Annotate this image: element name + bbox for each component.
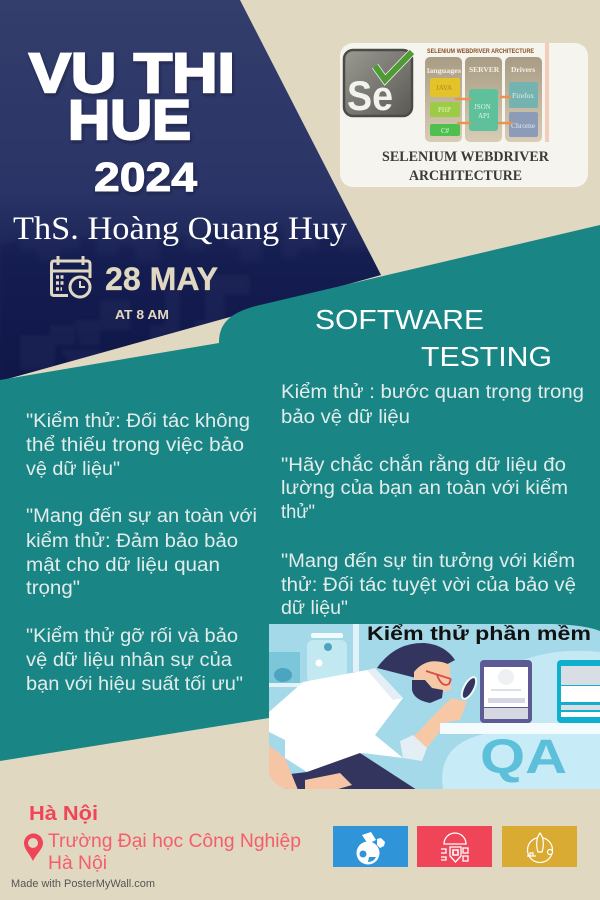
text block: left quotes: "Mang đến sự an toàn với xyxy=(26,505,257,527)
diagram column: server xyxy=(465,57,502,142)
arrows between diagram columns xyxy=(455,97,513,123)
text block: left quotes: thể thiếu trong việc bảo xyxy=(26,434,244,456)
diagram column: server: JSON xyxy=(474,103,491,111)
diagram column: languages: languages xyxy=(427,66,461,75)
location heading: Hà Nội xyxy=(29,803,98,825)
title: VU THI HUE: VU THI xyxy=(29,41,235,104)
text block: left quotes: kiểm thử: Đảm bảo bảo xyxy=(26,530,238,552)
year: 2024 xyxy=(94,154,197,200)
icon: Selenium logo: Se xyxy=(347,72,393,119)
heading: software testing xyxy=(315,304,552,372)
date: 28 MAY xyxy=(105,261,218,297)
phone mockup xyxy=(480,660,532,723)
diagram caption xyxy=(382,149,550,184)
title: VU THI HUE: HUE xyxy=(68,88,191,151)
text block: left quotes xyxy=(26,410,257,695)
figure: Selenium WebDriver architecture xyxy=(340,43,588,187)
icon: Selenium logo xyxy=(344,50,412,119)
text block: right quotes xyxy=(281,381,584,619)
text block: left quotes: "Kiểm thử gỡ rối và bảo xyxy=(26,625,238,647)
diagram caption: SELENIUM WEBDRIVER xyxy=(382,149,550,165)
text block: left quotes: trọng" xyxy=(26,577,80,599)
diagram column: server: SERVER xyxy=(469,65,500,74)
QA letters: QA xyxy=(480,731,567,784)
text block: right quotes: Kiểm thử : bước quan trọng trong xyxy=(281,381,584,403)
heading: software testing: TESTING xyxy=(421,341,552,372)
illustration: QA tester with magnifying glass xyxy=(269,624,600,790)
text block: left quotes: mật cho dữ liệu quan xyxy=(26,554,220,576)
diagram column: server: API xyxy=(478,112,490,120)
icon tile: rocket growth xyxy=(502,826,577,867)
diagram column: drivers: Firefox xyxy=(512,91,534,100)
watermark: Made with PosterMyWall.com xyxy=(11,878,155,890)
text block: left quotes: vệ dữ liệu nhân sự của xyxy=(26,649,232,671)
diagram column: drivers: Chrome xyxy=(511,121,536,130)
magnifying glass xyxy=(460,676,478,700)
text block: right quotes: dữ liệu" xyxy=(281,597,348,619)
diagram column: languages: JAVA xyxy=(436,84,452,92)
icon tile: money bag xyxy=(333,826,408,867)
text block: right quotes: thử: Đối tác tuyệt vời của bảo vệ xyxy=(281,574,576,596)
location address xyxy=(48,831,301,874)
text block: right quotes: "Mang đến sự tin tưởng với kiểm xyxy=(281,550,575,572)
text block: left quotes: bạn với hiệu suất tối ưu" xyxy=(26,673,243,695)
diagram column: languages: C# xyxy=(441,127,450,135)
panel: teal content area xyxy=(0,225,600,761)
title: VU THI HUE xyxy=(29,41,235,151)
lecturer name: ThS. Hoàng Quang Huy xyxy=(13,211,348,247)
text block: right quotes: thử" xyxy=(281,501,315,523)
diagram column: drivers xyxy=(505,57,542,142)
icon: map pin xyxy=(24,834,43,861)
text block: right quotes: bảo vệ dữ liệu xyxy=(281,406,410,428)
tablet mockup xyxy=(557,660,600,723)
text block: right quotes: lường của bạn an toàn với kiểm xyxy=(281,477,568,499)
icon: calendar with clock xyxy=(52,256,90,297)
time: AT 8 AM xyxy=(115,307,169,322)
tester head xyxy=(377,643,455,678)
diagram heading: SELENIUM WEBDRIVER ARCHITECTURE xyxy=(427,49,534,55)
icon tile: security shield xyxy=(417,826,492,867)
tester body xyxy=(269,670,403,772)
diagram column: languages: PHP xyxy=(438,106,451,114)
location address: Trường Đại học Công Nghiệp xyxy=(48,831,301,852)
diagram column: drivers: Drivers xyxy=(511,65,535,74)
location address: Hà Nội xyxy=(48,853,107,874)
text block: left quotes: "Kiểm thử: Đối tác không xyxy=(26,410,250,432)
diagram caption: ARCHITECTURE xyxy=(409,168,522,184)
heading: software testing: SOFTWARE xyxy=(315,304,484,335)
text block: right quotes: "Hãy chắc chắn rằng dữ liệu đo xyxy=(281,453,566,476)
text block: left quotes: vệ dữ liệu" xyxy=(26,458,120,480)
diagram column: languages xyxy=(425,57,462,142)
panel: navy header with city skyline xyxy=(0,0,381,390)
illustration title: Kiểm thử phần mềm xyxy=(367,624,591,645)
